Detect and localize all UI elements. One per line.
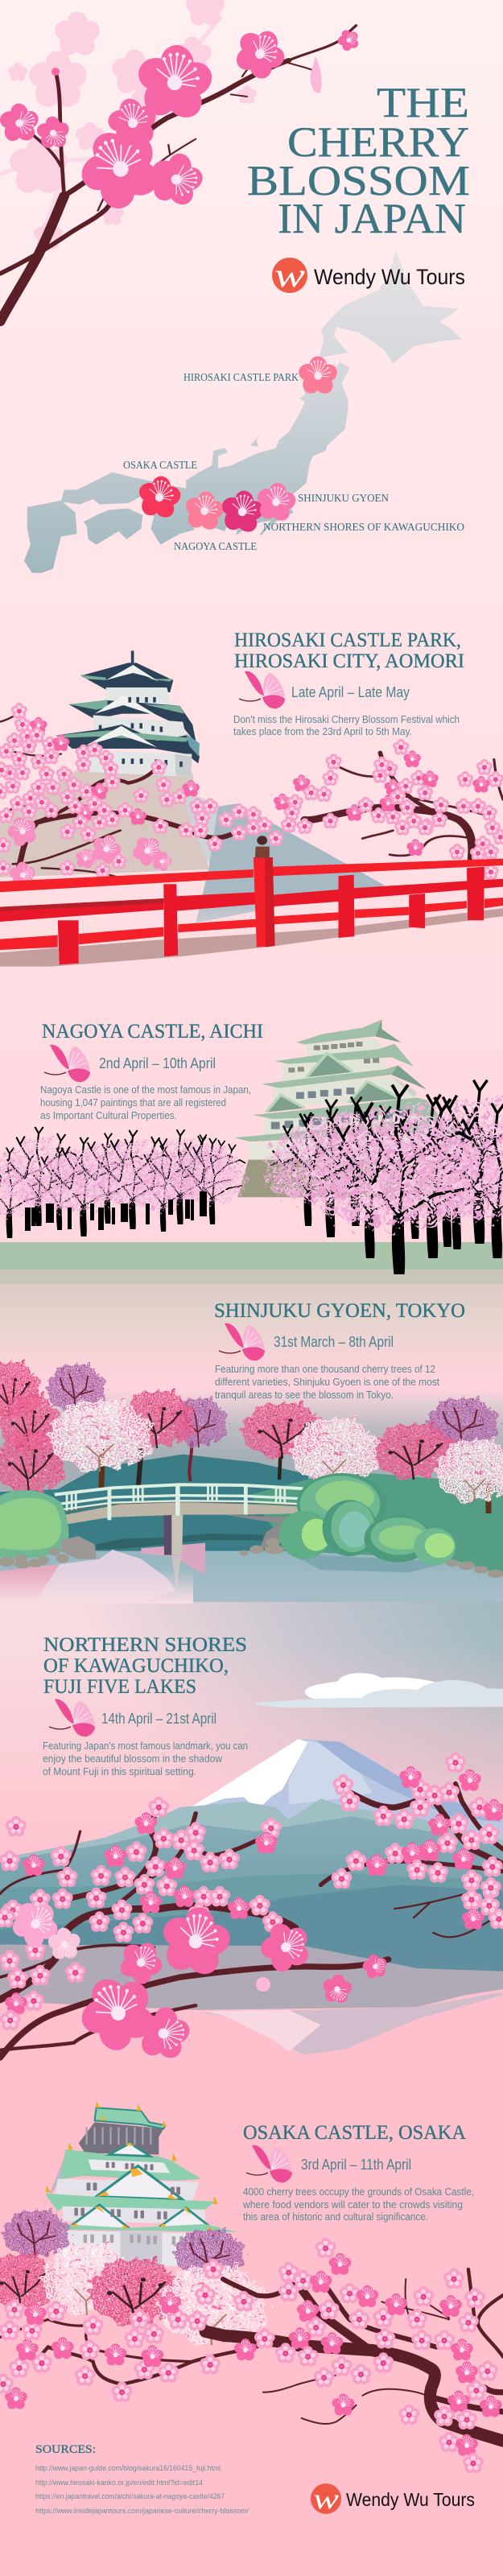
blossom branches right [273,739,503,880]
icon: blossom [44,1045,90,1082]
description [233,714,460,737]
hills [0,1455,503,1575]
Osaka castle [42,2101,237,2266]
sources: http://www.japan-guide.com/blog/sakura16/160415_fuji.html [35,2464,221,2473]
description: takes place from the 23rd April to 5th May. [233,726,412,737]
heading: OSAKA CASTLE, OSAKA [243,2122,466,2144]
Mount Fuji [0,1739,503,2054]
map labels: SHINJUKU GYOEN [298,493,389,505]
map labels [123,372,464,553]
sources [35,2443,249,2516]
description: Nagoya Castle is one of the most famous in Japan, [40,1084,251,1096]
cherry trees left row [0,1127,246,1238]
map labels: NAGOYA CASTLE [174,541,257,553]
sources: SOURCES: [35,2443,96,2456]
heading: FUJI FIVE LAKES [43,1676,196,1698]
map labels: HIROSAKI CASTLE PARK [183,372,299,384]
logo: Wendy Wu Tours: w [274,258,305,295]
large pale blossoms [2,812,171,894]
cherry trees right row [264,1080,503,1274]
red bridge [0,836,503,967]
main cherry branch [0,26,356,322]
sources: http://www.hirosaki-kanko.or.jp/en/edit.html?id=edit14 [35,2479,203,2487]
description: this area of historic and cultural significance. [243,2211,428,2223]
date: 31st March – 8th April [274,1333,394,1350]
description: 4000 cherry trees occupy the grounds of Osaka Castle, [243,2186,474,2198]
description: different varieties, Shinjuku Gyoen is one of the most [215,1377,439,1388]
description [242,2186,474,2223]
date: 2nd April – 10th April [99,1055,216,1071]
panel: header [0,0,470,322]
heading [234,630,464,672]
logo: Wendy Wu Tours: Wendy Wu Tours [314,265,465,289]
cloud [254,1673,503,1707]
description: Featuring more than one thousand cherry trees of 12 [215,1364,435,1375]
sources: https://en.japantravel.com/aichi/sakura-at-nagoya-castle/4267 [35,2492,225,2501]
Hirosaki castle [56,650,200,777]
title: IN JAPAN [278,196,466,242]
description: where food vendors will cater to the crowds visiting [242,2199,463,2211]
blossom branches left [0,703,284,878]
cherry trees [0,2210,265,2345]
icon: blossom [246,2145,292,2182]
logo: Wendy Wu Tours [311,2483,475,2515]
title: BLOSSOM [247,158,470,204]
faded background blossom branch [0,0,258,252]
logo: Wendy Wu Tours: Wendy Wu Tours [346,2489,475,2510]
map labels: NORTHERN SHORES OF KAWAGUCHIKO [263,522,464,534]
cherry trees [0,1361,503,1513]
heading: SHINJUKU GYOEN, TOKYO [214,1300,465,1322]
date: 3rd April – 11th April [301,2156,411,2173]
date: Late April – Late May [291,683,410,700]
heading: NAGOYA CASTLE, AICHI [42,1021,263,1042]
panel: Kawaguchiko [0,1634,503,2068]
heading: HIROSAKI CITY, AOMORI [234,650,464,672]
Nagoya castle [234,1020,462,1197]
title: THE [377,80,469,126]
description: tranquil areas to see the blossom in Tokyo. [215,1389,394,1401]
description [40,1084,251,1121]
icon: blossom [219,1323,265,1360]
panel: Hirosaki [0,630,503,967]
sources: https://www.insidejapantours.com/japanese-culture/cherry-blossom/ [35,2507,249,2516]
heading: HIROSAKI CASTLE PARK, [234,630,461,651]
description: housing 1,047 paintings that are all registered [40,1097,226,1108]
description: Don't miss the Hirosaki Cherry Blossom Festival which [233,714,460,725]
logo: Wendy Wu Tours: w [313,2483,339,2515]
title [247,80,470,242]
map silhouette [24,251,462,573]
date: 14th April – 21st April [101,1710,216,1727]
castle hill and mountain [0,770,385,923]
title: CHERRY [287,119,469,166]
panel: Osaka [0,2101,503,2516]
description [215,1364,439,1401]
blossom branches [0,2238,503,2473]
description: Featuring Japan's most famous landmark, you can [43,1740,248,1752]
large blossoms [0,19,365,227]
map labels: OSAKA CASTLE [123,460,197,472]
heading: NORTHERN SHORES [43,1634,247,1656]
garden bridge [55,1484,303,1555]
icon: blossom [239,671,285,708]
large blossoms [0,1890,393,2068]
panel: Nagoya [0,1020,503,1274]
map markers [134,356,340,538]
water reflections [0,1543,449,1604]
description [43,1740,248,1777]
heading: OF KAWAGUCHIKO, [43,1655,229,1677]
blossom branches [0,1752,503,2058]
shrubs and rocks [0,1473,503,1578]
heading [43,1634,247,1698]
description: enjoy the beautiful blossom in the shadow [43,1753,223,1765]
panel: Shinjuku Gyoen [0,1300,503,1604]
description: of Mount Fuji in this spiritual setting. [43,1766,196,1777]
logo: Wendy Wu Tours [272,258,465,295]
panel: map of Japan [24,251,464,573]
icon: blossom [49,1699,95,1736]
description: as Important Cultural Properties. [40,1110,177,1121]
